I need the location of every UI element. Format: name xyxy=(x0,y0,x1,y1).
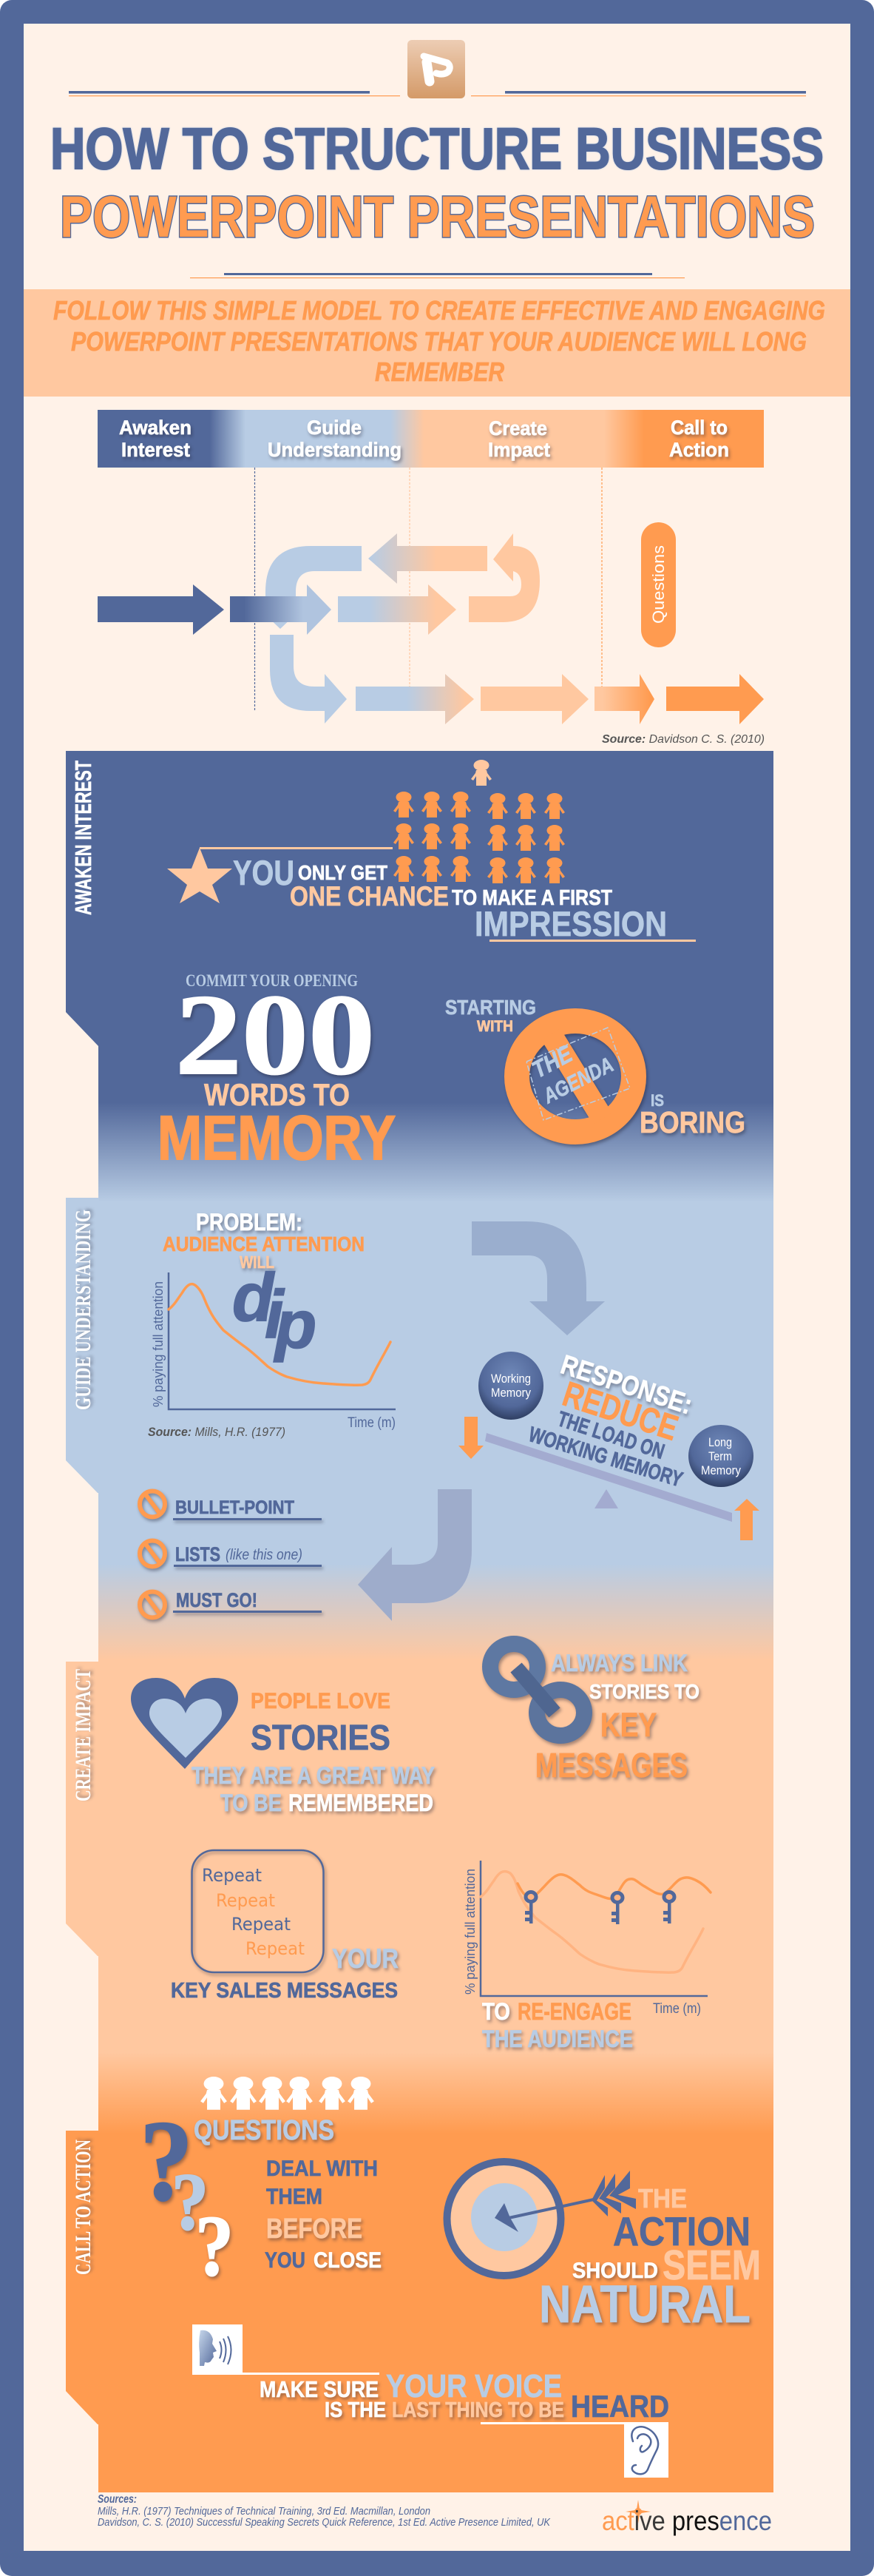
arrow: lower impact xyxy=(481,674,589,724)
bullet list xyxy=(140,1491,322,1617)
stage dividers xyxy=(254,468,602,710)
problem heading: AUDIENCE ATTENTION xyxy=(163,1233,365,1255)
re-engage text xyxy=(482,1998,633,2052)
arrow: to response xyxy=(472,1221,605,1335)
action natural text: ACTION xyxy=(613,2208,751,2254)
icon: question marks: ? xyxy=(140,2097,193,2225)
questions pill xyxy=(641,522,676,647)
re-engagement chart: Time (m) xyxy=(653,2001,701,2017)
bullet: must go xyxy=(140,1589,322,1617)
model stage bar: Awaken xyxy=(119,417,192,439)
voice heard text: MAKE SURE xyxy=(260,2376,379,2402)
questions text: YOU xyxy=(265,2248,305,2273)
always link stories text: KEY xyxy=(600,1706,657,1744)
bullet: lists: (like this one) xyxy=(226,1547,302,1563)
model stage bar: Impact xyxy=(488,439,550,461)
dip word: p xyxy=(273,1287,316,1363)
repeat box: Repeat xyxy=(202,1865,262,1886)
response text xyxy=(526,1349,696,1492)
action natural text: THE xyxy=(638,2183,687,2213)
starting with the agenda is boring: STARTING xyxy=(445,996,536,1019)
arrow: awaken xyxy=(98,584,224,635)
voice heard text: HEARD xyxy=(571,2389,669,2424)
arrow: guide to impact xyxy=(338,584,456,635)
tab: awaken interest: AWAKEN INTEREST xyxy=(70,761,96,915)
response text: RESPONSE: xyxy=(558,1349,696,1420)
arrow: impact to action xyxy=(594,674,654,724)
bullet: must go: MUST GO! xyxy=(176,1589,257,1611)
icon: chain link xyxy=(490,1644,584,1736)
starting with the agenda is boring: WITH xyxy=(477,1018,513,1035)
200 words text xyxy=(157,971,396,1173)
sources: Sources: xyxy=(98,2493,137,2506)
starting with the agenda is boring xyxy=(445,996,745,1139)
seesaw beam xyxy=(485,1433,732,1522)
icon: speaking head xyxy=(192,2324,379,2375)
arrow: down curve xyxy=(270,635,347,724)
questions text: THEM xyxy=(266,2185,322,2209)
bullet: bullet-point xyxy=(140,1491,322,1520)
icon: no-agenda sign: THE xyxy=(527,1039,577,1083)
200 words text: 200 xyxy=(175,971,375,1099)
icon: keys xyxy=(525,1892,674,1924)
people love stories text: TO BE xyxy=(220,1790,282,1816)
icon: question marks xyxy=(140,2097,234,2294)
people love stories text xyxy=(192,1689,435,1816)
action natural text: NATURAL xyxy=(539,2276,751,2334)
icon: heart xyxy=(131,1678,238,1769)
attention chart: % paying full attention xyxy=(151,1281,166,1407)
model stage bar: Action xyxy=(669,439,729,461)
source note: Source: Davidson C. S. (2010) xyxy=(602,733,765,746)
voice heard text: LAST THING TO BE xyxy=(392,2398,564,2422)
response text: THE LOAD ON xyxy=(555,1407,667,1464)
model stage bar xyxy=(98,410,764,468)
arrow: u-turn xyxy=(469,533,540,622)
arrow: back to start xyxy=(368,533,487,584)
flow diagram arrows xyxy=(98,533,764,724)
model stage bar: Interest xyxy=(121,439,190,461)
tab: call to action xyxy=(66,2131,99,2424)
repeat box: Repeat xyxy=(231,1914,291,1935)
action natural text xyxy=(539,2183,761,2334)
model stage bar: Create xyxy=(489,417,547,439)
header rules xyxy=(69,91,806,96)
long term memory ball: Memory xyxy=(701,1463,741,1477)
icon: target and arrow xyxy=(447,2162,636,2276)
icon: no-agenda sign: AGENDA xyxy=(539,1053,617,1109)
questions text: QUESTIONS xyxy=(194,2115,334,2146)
icon: question marks: ? xyxy=(195,2199,234,2294)
re-engage text: TO xyxy=(482,1998,510,2025)
problem heading xyxy=(163,1209,365,1272)
questions text: BEFORE xyxy=(266,2213,362,2245)
dip word xyxy=(232,1260,316,1363)
tab: guide understanding xyxy=(66,1198,99,1493)
subtitle band xyxy=(24,289,850,397)
questions text: DEAL WITH xyxy=(266,2157,378,2181)
arrow: lower guide xyxy=(356,674,474,724)
re-engage text: RE-ENGAGE xyxy=(518,1998,631,2025)
always link stories text: ALWAYS LINK xyxy=(551,1650,688,1676)
always link stories text: STORIES TO xyxy=(589,1680,699,1703)
sources xyxy=(98,2493,551,2529)
repeat box xyxy=(192,1850,324,1972)
icon: ear xyxy=(481,2422,668,2478)
repeat box: Repeat xyxy=(216,1890,275,1911)
response text: REDUCE xyxy=(558,1375,682,1449)
questions pill: Questions xyxy=(649,545,668,624)
starting with the agenda is boring: IS xyxy=(651,1091,664,1110)
tab: create impact: CREATE IMPACT xyxy=(71,1669,95,1801)
model stage bar: Guide xyxy=(307,417,362,439)
title xyxy=(50,115,824,249)
always link stories text xyxy=(535,1650,699,1784)
questions text xyxy=(194,2115,382,2273)
people love stories text: THEY ARE A GREAT WAY xyxy=(192,1762,435,1789)
voice heard text: IS THE xyxy=(325,2398,386,2422)
people love stories text: REMEMBERED xyxy=(288,1790,433,1816)
re-engagement chart: % paying full attention xyxy=(463,1869,478,1995)
re-engagement chart xyxy=(463,1861,711,2017)
repeat box: Repeat xyxy=(245,1938,305,1959)
sources: Davidson, C. S. (2010) Successful Speaking Secrets Quick Reference, 1st Ed. Active Presence Limited, UK xyxy=(98,2516,551,2529)
re-engage text: THE AUDIENCE xyxy=(482,2026,633,2052)
200 words text: COMMIT YOUR OPENING xyxy=(186,971,358,990)
starting with the agenda is boring: BORING xyxy=(640,1105,745,1139)
always link stories text: MESSAGES xyxy=(535,1746,688,1784)
dip word: i xyxy=(265,1277,285,1352)
arrow: to bullet list xyxy=(358,1489,472,1621)
tab: awaken interest xyxy=(66,751,99,1046)
long term memory ball xyxy=(688,1425,753,1487)
icon: questioners row xyxy=(200,2077,374,2110)
tab: call to action: CALL TO ACTION xyxy=(71,2140,95,2275)
long term memory ball: Term xyxy=(708,1449,732,1463)
active presence logo: active presence xyxy=(602,2506,772,2536)
icon: star with rule xyxy=(167,847,393,903)
seesaw fulcrum xyxy=(594,1489,618,1508)
working memory ball: Memory xyxy=(491,1386,531,1400)
subtitle band: REMEMBER xyxy=(375,357,504,387)
working memory ball: Working xyxy=(491,1372,531,1386)
arrow: down xyxy=(458,1417,484,1459)
icon: audience of people xyxy=(393,760,565,883)
first impression text: ONLY GET xyxy=(298,861,387,884)
working memory ball xyxy=(478,1352,543,1420)
icon: question marks: ? xyxy=(172,2157,209,2247)
long term memory ball: Long xyxy=(708,1435,732,1449)
dip word: d xyxy=(232,1260,275,1335)
sources: Mills, H.R. (1977) Techniques of Technical Training, 3rd Ed. Macmillan, London xyxy=(98,2505,430,2518)
title rules xyxy=(190,273,685,278)
action natural text: SHOULD xyxy=(572,2259,658,2283)
your key sales messages text: YOUR xyxy=(332,1943,399,1974)
seesaw diagram xyxy=(458,1349,759,1540)
icon: powerpoint logo xyxy=(407,40,465,98)
arrow: guide start xyxy=(230,584,331,635)
model stage bar: Understanding xyxy=(268,439,402,461)
problem heading: PROBLEM: xyxy=(196,1209,302,1235)
arrow: up xyxy=(734,1499,759,1540)
tab: guide understanding: GUIDE UNDERSTANDING xyxy=(71,1210,95,1410)
voice heard text: YOUR VOICE xyxy=(386,2368,562,2404)
first impression text: IMPRESSION xyxy=(475,904,667,943)
people love stories text: PEOPLE LOVE xyxy=(251,1689,390,1713)
chart source: Source: Mills, H.R. (1977) xyxy=(148,1425,285,1439)
arrow: action xyxy=(666,674,764,724)
questions text: CLOSE xyxy=(314,2248,382,2273)
your key sales messages text: KEY SALES MESSAGES xyxy=(171,1979,398,2003)
action natural text: SEEM xyxy=(663,2242,761,2289)
response text: WORKING MEMORY xyxy=(526,1423,685,1492)
bullet: bullet-point: BULLET-POINT xyxy=(175,1497,294,1518)
tab: create impact xyxy=(66,1662,99,1956)
arrow: loop back curve xyxy=(253,546,362,629)
attention chart xyxy=(151,1260,396,1431)
first impression text: YOU xyxy=(233,853,294,892)
icon: no-agenda sign xyxy=(517,1021,634,1132)
bullet: lists xyxy=(140,1540,322,1567)
attention chart: Time (m) xyxy=(348,1415,396,1431)
first impression text: TO MAKE A FIRST xyxy=(452,886,612,910)
first impression text xyxy=(233,853,696,943)
200 words text: WORDS TO xyxy=(204,1077,350,1112)
your key sales messages text xyxy=(171,1943,399,2003)
section background xyxy=(98,751,773,2492)
voice heard text xyxy=(260,2368,669,2424)
200 words text: MEMORY xyxy=(157,1103,396,1173)
bullet: lists: LISTS xyxy=(175,1543,220,1565)
problem heading: WILL xyxy=(240,1252,274,1272)
people love stories text: STORIES xyxy=(251,1719,390,1758)
first impression text: ONE CHANCE xyxy=(290,881,449,911)
model stage bar: Call to xyxy=(671,417,728,439)
